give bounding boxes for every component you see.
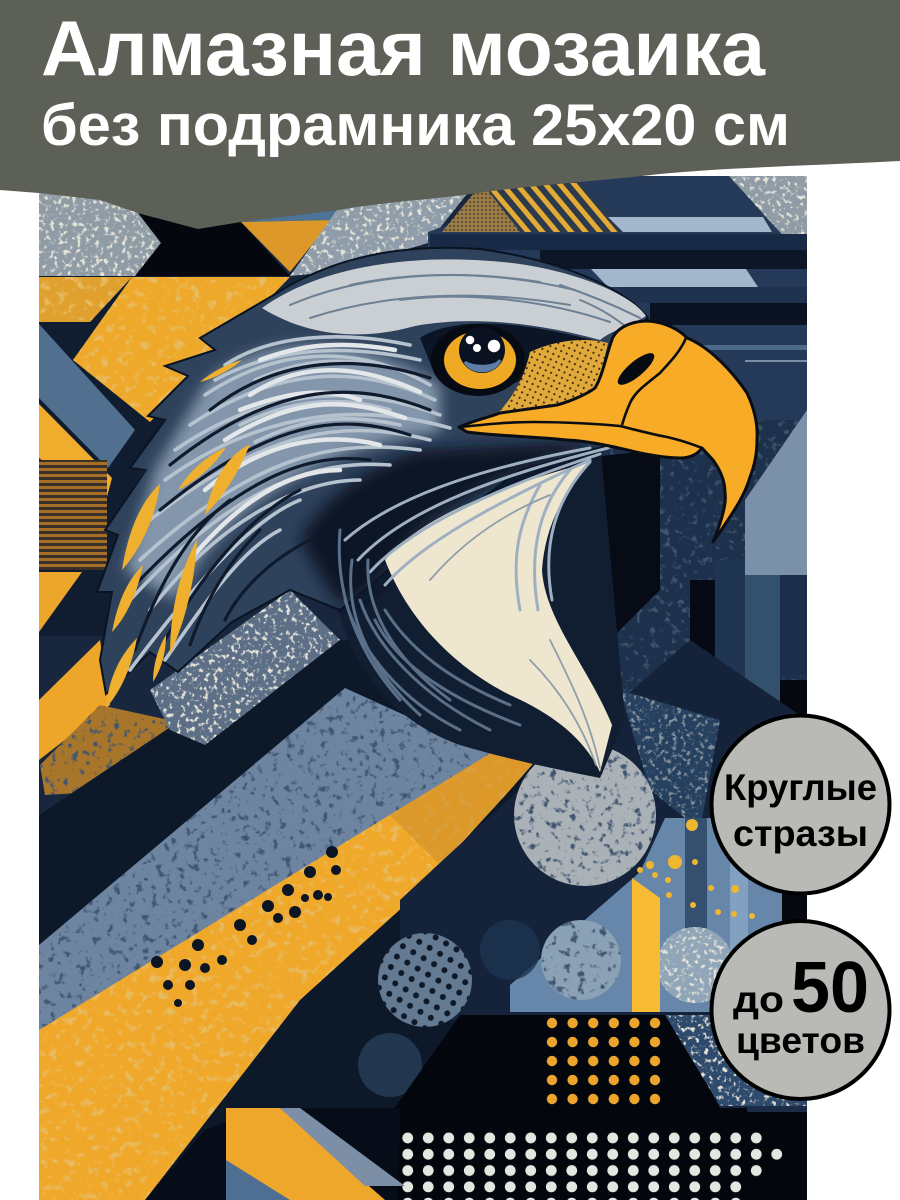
blue panel [510,818,782,1012]
gold bar [632,878,660,1012]
silver feathers above chest [345,448,608,610]
eye [431,324,525,396]
header banner [0,0,900,229]
yellow skin patch [498,340,608,413]
panel: left geometric shapes [39,276,290,795]
panel: diagonal bands [39,591,535,1200]
halftone circle [378,933,472,1027]
title: Алмазная мозаика [41,4,766,92]
panel: eagle artwork [39,176,807,1200]
panel: moon and bottom circles [358,640,807,1097]
white dots [398,1130,787,1200]
panel: top geometric shapes [39,176,807,420]
eagle grey crown [262,259,646,340]
eagle white chest [385,462,612,772]
eagle head silhouette [97,248,648,694]
eye surround [420,324,596,384]
badge: up to 50 colours [712,921,890,1099]
beak [459,321,757,542]
badge: up to 50 colours: цветов [736,1020,865,1061]
eagle neck feathers [339,530,520,730]
eagle [97,248,757,778]
panel: bottom left shapes [145,1108,405,1200]
eagle neck shadow [330,440,625,778]
eagle light blurred feather tone [125,346,440,600]
moon [514,744,656,886]
subtitle: без подрамника 25х20 см [41,93,790,158]
gold dots [546,1018,660,1104]
badge: round rhinestones: Круглые [724,767,877,808]
gold splatter [637,819,755,919]
panel: right geometric shapes [601,410,807,714]
badge: round rhinestones: стразы [733,813,868,854]
eagle gold feather streaks [106,360,250,708]
eagle light face feathers [130,337,450,670]
badge: round rhinestones [712,716,890,894]
badge: up to 50 colours: до [733,979,784,1020]
black dots on gold band [151,846,341,1007]
badge: up to 50 colours: 50 [791,948,869,1028]
chest feather lines [430,495,600,768]
panel: bottom dot grids [394,1015,807,1200]
eagle dark lower feathers [300,440,610,604]
